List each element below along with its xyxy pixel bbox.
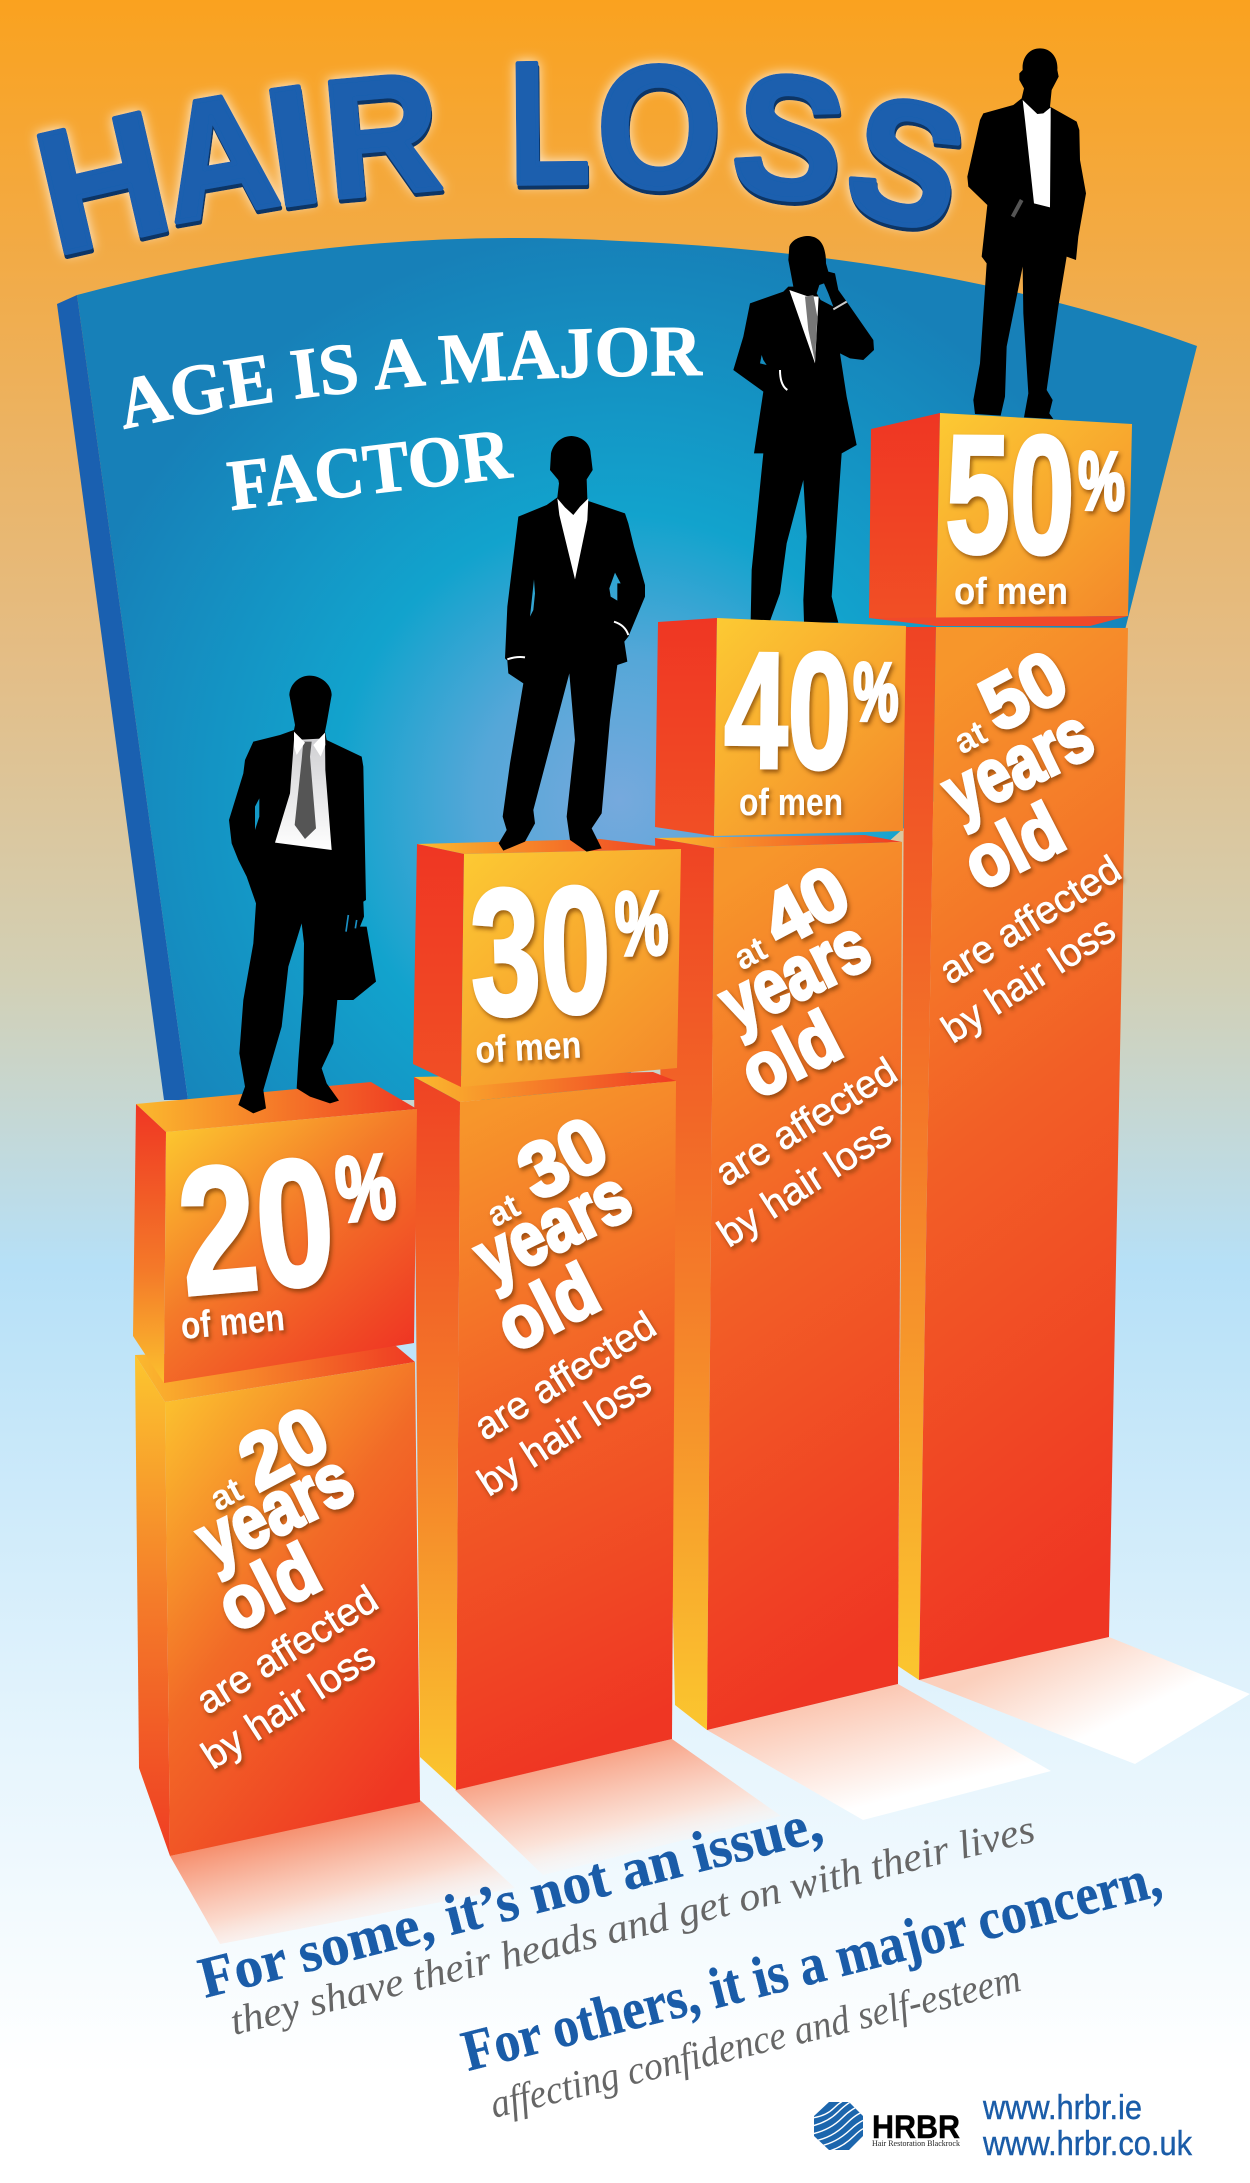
label: at 40 years old are affected by hair loss: 40	[748, 849, 863, 964]
title: HAIR LOSS: A	[147, 55, 289, 259]
title: HAIR LOSS: L	[508, 25, 591, 221]
title: HAIR LOSS: S	[723, 34, 855, 240]
figure: man on 20% box with briefcase	[229, 676, 376, 1113]
box: 40%	[655, 618, 906, 836]
closing text: for others: affecting confidence and self-esteem	[486, 1955, 1025, 2127]
label: at 20 years old are affected by hair loss: 20	[225, 1389, 342, 1507]
label: 20% of men: 20	[171, 1121, 342, 1334]
column: 50 years	[898, 627, 1128, 1680]
title: HAIR LOSS: I	[255, 50, 331, 242]
label: 40% of men	[724, 619, 899, 824]
label: at 50 years old are affected by hair loss: at	[947, 713, 993, 762]
heading: age is a major factor: AGE IS A MAJOR	[123, 328, 703, 430]
title: HAIR LOSS: S	[830, 55, 983, 270]
label: 30% of men: %	[614, 873, 669, 975]
panel: blue curved backdrop	[57, 238, 1197, 1100]
website links	[982, 2089, 1193, 2163]
logo text: HRBR Hair Restoration Blackrock: HRBR	[872, 2109, 960, 2145]
label: at 30 years old are affected by hair loss: are affected	[467, 1304, 664, 1449]
label: at 40 years old are affected by hair loss: at	[727, 929, 773, 978]
label: at 40 years old are affected by hair loss: are affected	[708, 1050, 905, 1195]
icon: HRBR hair logo	[814, 2102, 863, 2150]
label: at 40 years old are affected by hair loss: by hair loss	[710, 1112, 899, 1256]
column: 20 years	[135, 1346, 420, 1856]
label: 50% of men	[945, 400, 1125, 613]
label: at 30 years old are affected by hair loss: old	[483, 1247, 612, 1368]
closing text: for some: they shave their heads and get on with their lives	[226, 1806, 1039, 2044]
column: 30 years	[414, 1072, 676, 1790]
label: 50% of men: %	[1078, 435, 1125, 527]
logo text: HRBR Hair Restoration Blackrock: Hair Restoration Blackrock	[872, 2139, 960, 2148]
title: HAIR LOSS	[19, 25, 983, 291]
label: at 50 years old are affected by hair loss: by hair loss	[934, 908, 1123, 1052]
label: at 20 years old are affected by hair loss: years	[183, 1436, 366, 1584]
label: at 20 years old are affected by hair loss	[183, 1389, 386, 1778]
website links: www.hrbr.co.uk	[982, 2125, 1193, 2163]
website links: www.hrbr.ie	[982, 2089, 1142, 2127]
label: at 20 years old are affected by hair loss: old	[204, 1527, 333, 1648]
label: at 30 years old are affected by hair loss	[461, 1099, 664, 1505]
label: at 50 years old are affected by hair loss: years	[929, 692, 1106, 836]
label: 50% of men: 50	[945, 400, 1075, 589]
label: 30% of men	[468, 848, 669, 1072]
label: 40% of men: 40	[724, 619, 852, 804]
label: 30% of men: 30	[468, 848, 613, 1053]
box: 30%	[413, 839, 681, 1087]
heading: age is a major factor: FACTOR	[226, 432, 514, 510]
label: at 50 years old are affected by hair loss: old	[950, 787, 1077, 906]
label: at 50 years old are affected by hair loss: 50	[966, 634, 1081, 749]
label: at 50 years old are affected by hair loss: are affected	[932, 848, 1129, 993]
title: HAIR LOSS: H	[19, 73, 186, 291]
label: at 50 years old are affected by hair loss	[929, 634, 1129, 1052]
box: 20%	[133, 1082, 417, 1383]
figure: man on 50% box	[967, 48, 1086, 419]
figure: man on 30% box	[499, 436, 645, 852]
closing text: for some: For some, it’s not an issue,	[192, 1790, 828, 2011]
label: at 40 years old are affected by hair loss: years	[706, 903, 883, 1047]
label: at 30 years old are affected by hair loss: by hair loss	[470, 1361, 659, 1505]
floor shadows under columns	[170, 1637, 1250, 1944]
box: 50%	[869, 413, 1132, 626]
figure: man on 40% box	[733, 236, 874, 623]
label: 30% of men: of men	[474, 1024, 582, 1072]
label: 50% of men: of men	[954, 571, 1068, 613]
label: 40% of men: of men	[739, 782, 843, 824]
label: 20% of men: %	[332, 1133, 399, 1241]
label: at 20 years old are affected by hair loss: by hair loss	[194, 1634, 383, 1778]
closing text: for others: For others, it is a major concern,	[455, 1844, 1167, 2084]
label: at 30 years old are affected by hair loss: years	[461, 1153, 644, 1301]
label: at 20 years old are affected by hair loss: are affected	[189, 1578, 386, 1723]
label: 20% of men: of men	[179, 1297, 286, 1348]
column: 40 years	[655, 835, 902, 1730]
title: HAIR LOSS: R	[316, 37, 448, 234]
label: at 40 years old are affected by hair loss	[706, 849, 905, 1256]
label: at 40 years old are affected by hair loss: old	[727, 995, 854, 1114]
heading: age is a major factor	[123, 328, 703, 510]
label: at 20 years old are affected by hair loss: at	[203, 1470, 249, 1519]
label: at 30 years old are affected by hair loss: at	[480, 1186, 526, 1235]
label: at 30 years old are affected by hair loss: 30	[504, 1099, 621, 1217]
title: HAIR LOSS: O	[597, 31, 721, 224]
label: 40% of men: %	[853, 647, 899, 738]
